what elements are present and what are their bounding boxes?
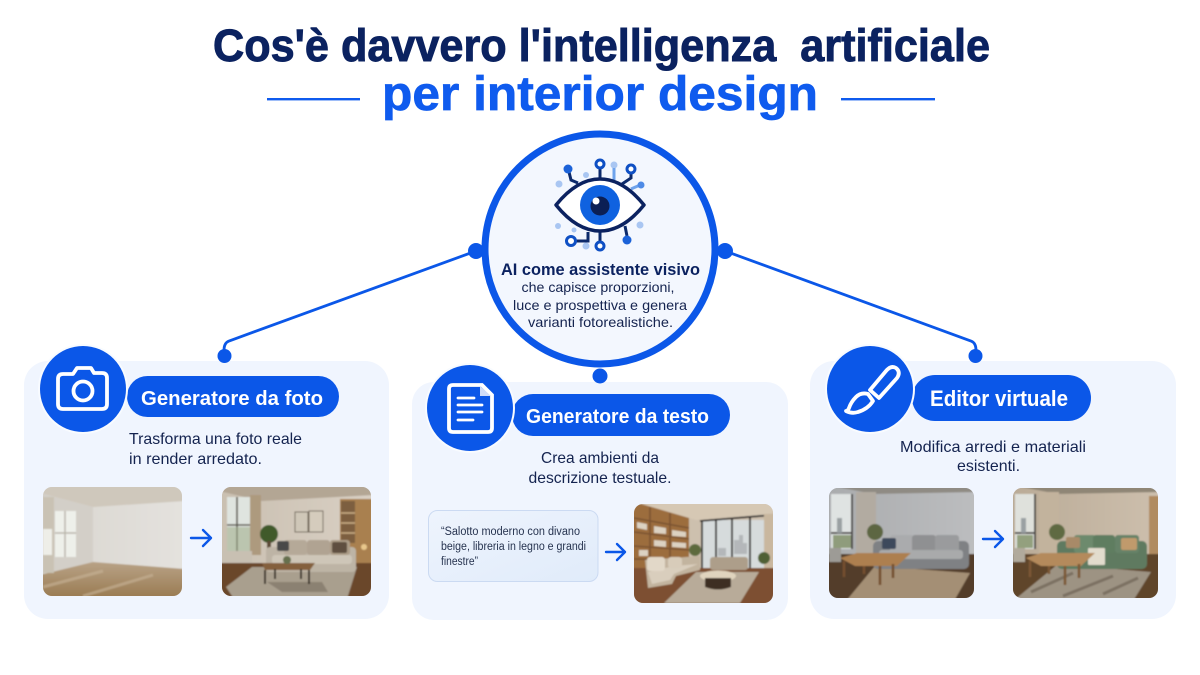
central circle: [485, 134, 715, 364]
prompt box: “Salotto moderno con divano: [441, 526, 580, 538]
connector: left: [218, 243, 484, 363]
description: generatore da foto: in render arredato.: [129, 451, 262, 468]
description: generatore da foto: Trasforma una foto reale: [129, 431, 302, 448]
icon: paintbrush: [825, 344, 915, 434]
description: generatore da foto: [129, 431, 302, 468]
arrow: [191, 530, 211, 546]
description: generatore da testo: descrizione testuale.: [528, 470, 672, 487]
photo: green sofa living room: [1010, 485, 1161, 601]
icon: camera: [38, 344, 128, 434]
description: editor virtuale: Modifica arredi e materiali: [900, 439, 1086, 456]
photo: furnished room: [219, 484, 374, 599]
panel: editor virtuale: [810, 344, 1176, 619]
pill heading: generatore da foto: [127, 376, 339, 417]
prompt box: [428, 510, 598, 582]
photo: grey living room: [826, 485, 977, 601]
description: generatore da testo: Crea ambienti da: [541, 450, 659, 467]
circle text: AI come assistente visivo: [501, 261, 700, 279]
photo: living room from text: [631, 501, 776, 606]
title: [213, 20, 990, 121]
pill heading: generatore da foto: Generatore da foto: [141, 387, 323, 410]
title line 1: Cos'è davvero l'intelligenza artificiale: [213, 20, 990, 71]
description: editor virtuale: [900, 439, 1086, 475]
pill heading: generatore da testo: Generatore da testo: [526, 405, 709, 428]
arrow: [606, 544, 625, 560]
arrow: [983, 531, 1003, 547]
pill heading: editor virtuale: [912, 375, 1091, 421]
pill heading: generatore da testo: [512, 394, 730, 436]
panel: generatore da foto: [24, 344, 389, 619]
prompt box: finestre”: [441, 556, 478, 568]
circle text: che capisce proporzioni,: [522, 279, 674, 295]
icon: AI eye: [555, 160, 644, 250]
prompt box: beige, libreria in legno e grandi: [441, 541, 586, 553]
description: editor virtuale: esistenti.: [957, 458, 1020, 475]
circle text: luce e prospettiva e genera: [513, 297, 687, 313]
panel: generatore da testo: [412, 363, 788, 620]
title line 2: per interior design: [382, 68, 818, 121]
connector: centre: [592, 368, 608, 384]
circle text: [501, 261, 700, 330]
description: generatore da testo: [528, 450, 672, 487]
photo: empty room: [40, 484, 185, 599]
circle text: varianti fotorealistiche.: [528, 314, 673, 330]
icon: document: [425, 363, 515, 453]
connector: right: [717, 243, 982, 363]
pill heading: editor virtuale: Editor virtuale: [930, 386, 1068, 411]
